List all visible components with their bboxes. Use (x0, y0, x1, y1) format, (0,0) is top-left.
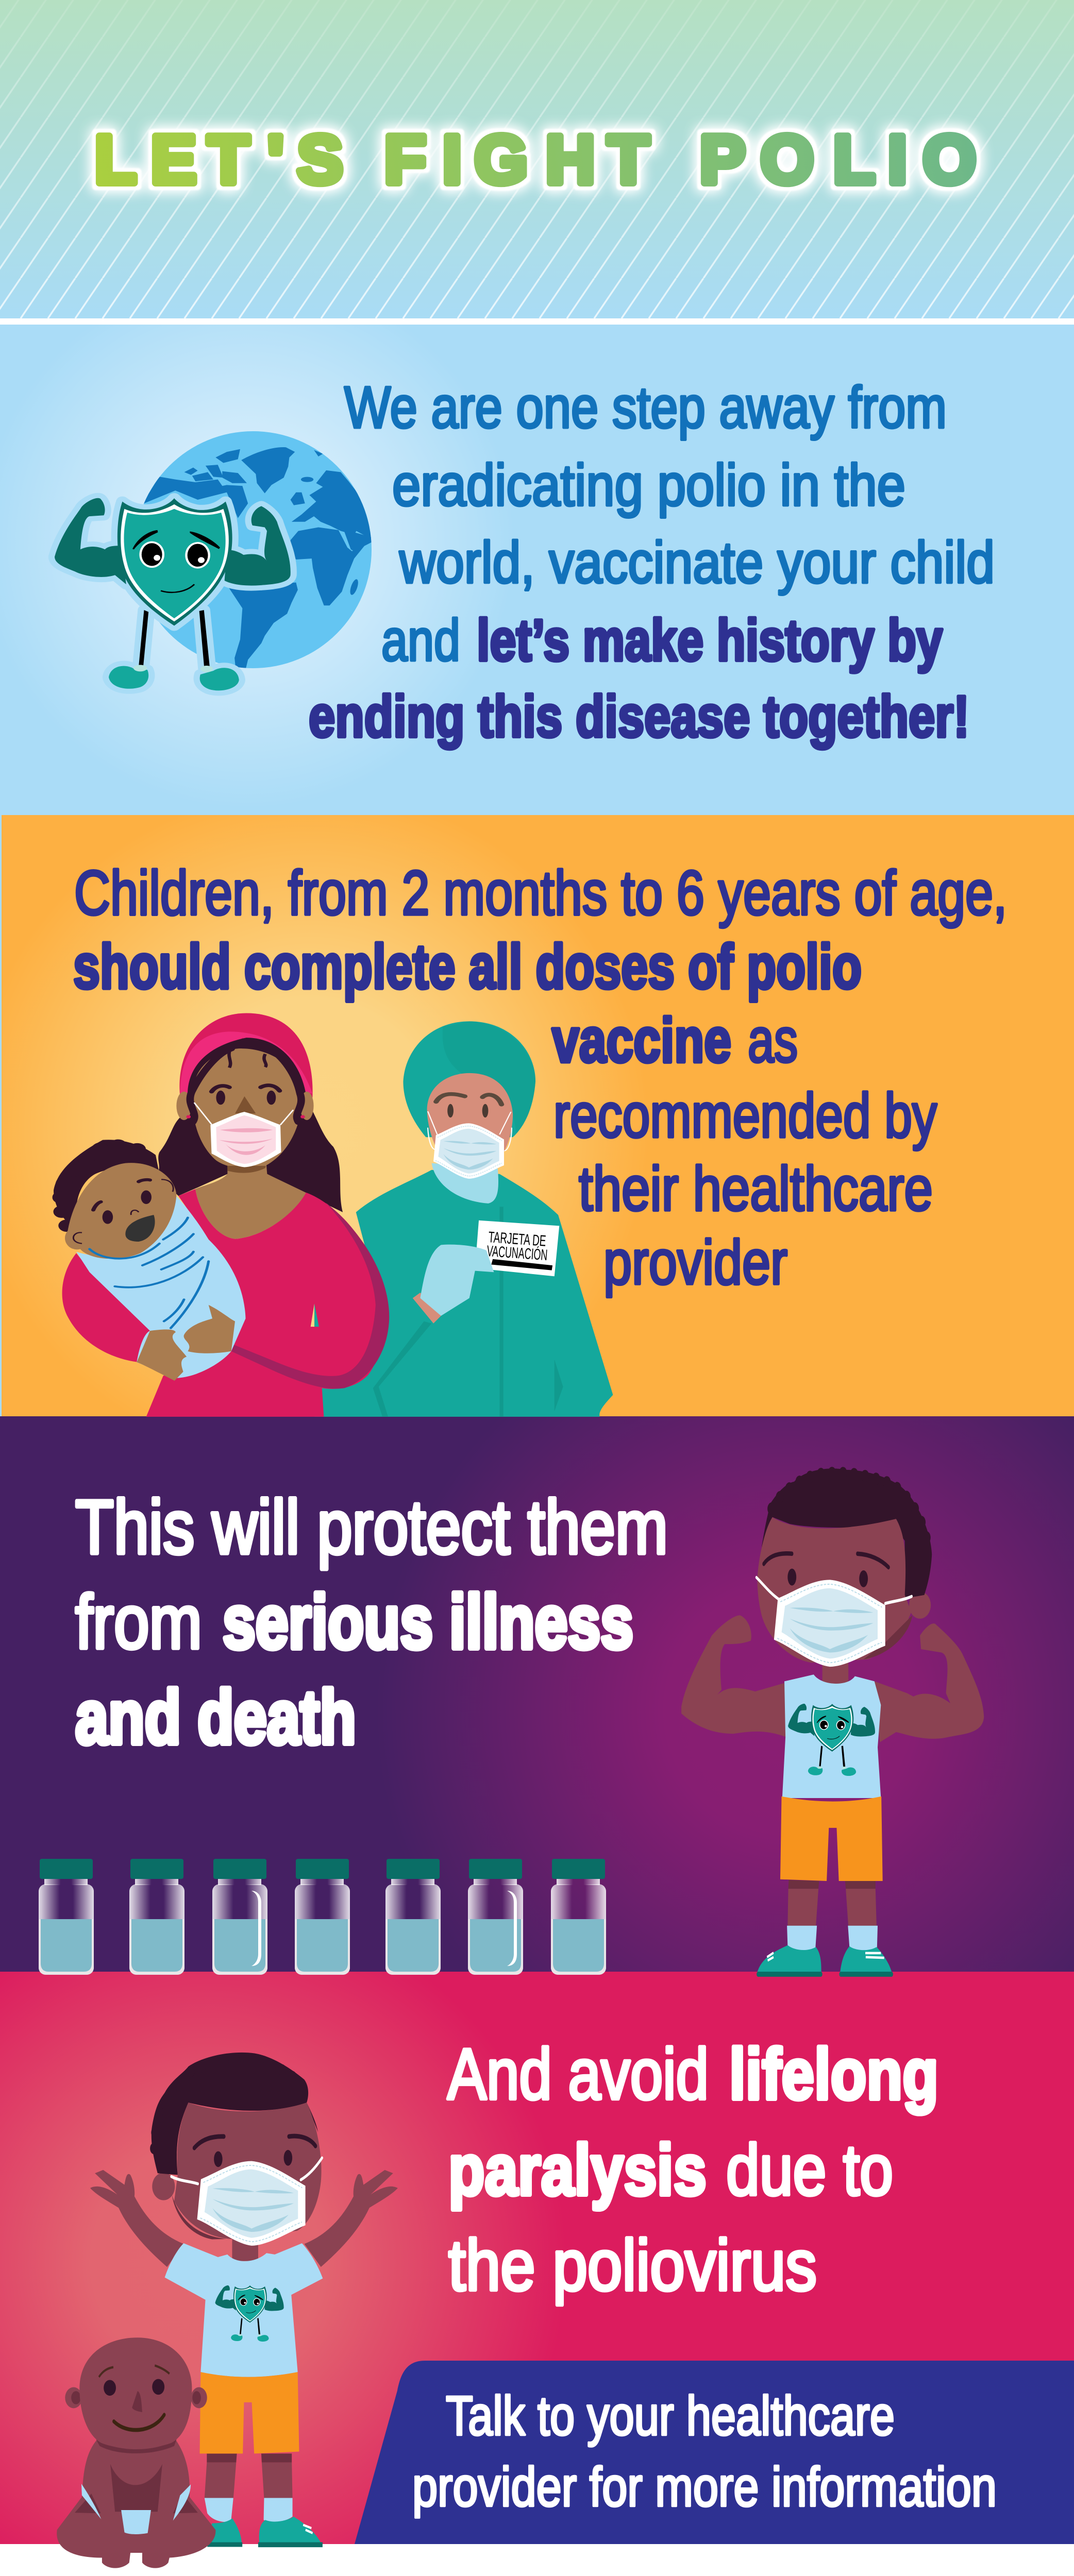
callout: talk to your healthcare provider: Talk to your healthcare (446, 2384, 895, 2447)
text: children from 2 months to 6 years: should complete all doses of polio (73, 931, 862, 1002)
icon: nurse mask (433, 1123, 504, 1179)
icon: shield mascot flexing (55, 498, 291, 690)
illustration: healthcare worker with vaccination card (314, 1021, 613, 1417)
icon: mask on boy with raised arms (197, 2161, 306, 2246)
panel: blue eradication section (0, 325, 1074, 815)
text: children from 2 months to 6 years: as (748, 1005, 798, 1075)
text: we are one step away (309, 375, 995, 750)
text: children from 2 months to 6 years: their healthcare (579, 1154, 933, 1224)
illustration: seated baby (57, 2337, 215, 2568)
text: children from 2 months to 6 years: vaccine (552, 1005, 731, 1075)
callout: talk to your healthcare provider (355, 2361, 1074, 2544)
text: and avoid lifelong paralysis: lifelong (729, 2033, 938, 2114)
text: we are one step away: let’s make history by (477, 608, 943, 673)
illustration: boy flexing muscles (681, 1468, 984, 1977)
text: we are one step away: world, vaccinate your child (399, 530, 995, 596)
icon: shield mascot on t-shirt (215, 2285, 284, 2342)
text: and avoid lifelong paralysis: paralysis (448, 2129, 707, 2210)
text: vaccination card label: VACUNACIÓN (486, 1243, 548, 1264)
text: vaccination card label: TARJETA DE (488, 1229, 547, 1250)
panel: orange vaccination section (0, 815, 1074, 1417)
text: we are one step away: and (381, 608, 460, 673)
text: children from 2 months to 6 years (73, 858, 1007, 1297)
text: and avoid lifelong paralysis (447, 2033, 938, 2306)
text: this will protect them: serious illness (223, 1580, 633, 1665)
text: children from 2 months to 6 years: recommended by (553, 1080, 937, 1150)
icon: row of vaccine vials (39, 1859, 606, 1975)
illustration: boy with raised arms (90, 2053, 398, 2547)
text: children from 2 months to 6 years: provider (603, 1227, 787, 1297)
text: this will protect them: This will protect them (75, 1485, 668, 1570)
text: and avoid lifelong paralysis: the poliovirus (448, 2225, 817, 2306)
panel: protection purple section (0, 1416, 1074, 1977)
text: this will protect them: from (75, 1580, 202, 1665)
panel: title header (0, 0, 1074, 325)
text: we are one step away: eradicating polio in the (392, 453, 905, 518)
text: vaccination card label (486, 1229, 548, 1264)
text: this will protect them: and death (75, 1675, 356, 1760)
illustration: globe (135, 431, 374, 669)
illustration: mother holding baby (54, 1013, 389, 1417)
text: and avoid lifelong paralysis: due to (726, 2129, 893, 2210)
text: and avoid lifelong paralysis: And avoid (447, 2033, 709, 2114)
panel: closing pink section (0, 1972, 1074, 2568)
text: this will protect them (75, 1485, 668, 1760)
text: we are one step away: We are one step away from (344, 375, 947, 440)
title: LET'S FIGHT POLIO (95, 122, 976, 197)
